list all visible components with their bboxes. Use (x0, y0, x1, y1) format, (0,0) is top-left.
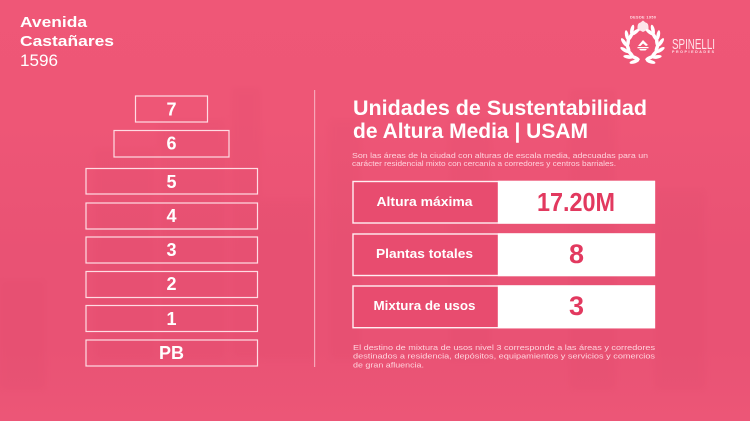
footnote (353, 343, 655, 370)
floor 4 (86, 203, 258, 229)
floor 7 (136, 96, 208, 122)
ground floor PB: PB (159, 343, 184, 363)
logo wordmark: SPINELLI (672, 37, 715, 53)
ground floor PB (86, 340, 258, 366)
stat: altura máxima (353, 181, 655, 224)
floor 5: 5 (166, 172, 177, 192)
floor 3: 3 (166, 240, 177, 260)
floor 6 (114, 130, 229, 157)
stat: plantas totales: 8 (569, 239, 584, 269)
icon: crest (638, 20, 648, 32)
floor 1 (86, 306, 258, 332)
address heading: Avenida (20, 14, 88, 31)
stat: mixtura de usos (353, 285, 655, 328)
stat: mixtura de usos: 3 (569, 291, 584, 321)
intro paragraph (352, 151, 648, 168)
intro paragraph: carácter residencial mixto con cercanía a corredores y centros barriales. (352, 159, 616, 168)
address heading: 1596 (20, 52, 58, 70)
address heading: Castañares (20, 33, 114, 50)
stat: plantas totales: Plantas totales (376, 247, 473, 261)
icon: roof emblem (638, 40, 648, 50)
stat: altura máxima: 17.20M (537, 189, 615, 217)
vertical divider (314, 90, 315, 367)
main title: de Altura Media | USAM (353, 120, 588, 143)
floor stack diagram (86, 96, 258, 366)
floor 1: 1 (166, 309, 177, 329)
floor 6: 6 (166, 134, 177, 154)
floor 2: 2 (166, 274, 177, 294)
floor 3 (86, 237, 258, 263)
main title: Unidades de Sustentabilidad (353, 97, 647, 120)
stat: plantas totales (353, 233, 655, 276)
floor 4: 4 (166, 206, 177, 226)
intro paragraph: Son las áreas de la ciudad con alturas de escala media, adecuadas para un (352, 151, 648, 160)
logo subtitle: PROPIEDADES (672, 50, 715, 54)
stat: mixtura de usos: Mixtura de usos (374, 299, 476, 313)
address heading (20, 14, 114, 70)
footnote: destinados a residencia, depósitos, equipamientos y servicios y comercios (353, 352, 655, 360)
main title (353, 97, 647, 143)
floor 7: 7 (166, 100, 177, 120)
floor 5 (86, 168, 258, 194)
footnote: de gran afluencia. (353, 360, 424, 370)
logo tagline: DESDE 1950 (630, 16, 656, 20)
floor 2 (86, 272, 258, 298)
stat: altura máxima: Altura máxima (376, 195, 474, 209)
footnote: El destino de mixtura de usos nivel 3 corresponde a las áreas y corredores (353, 343, 655, 352)
icon: laurel wreath (619, 23, 666, 67)
logo: Spinelli Propiedades (619, 16, 715, 67)
